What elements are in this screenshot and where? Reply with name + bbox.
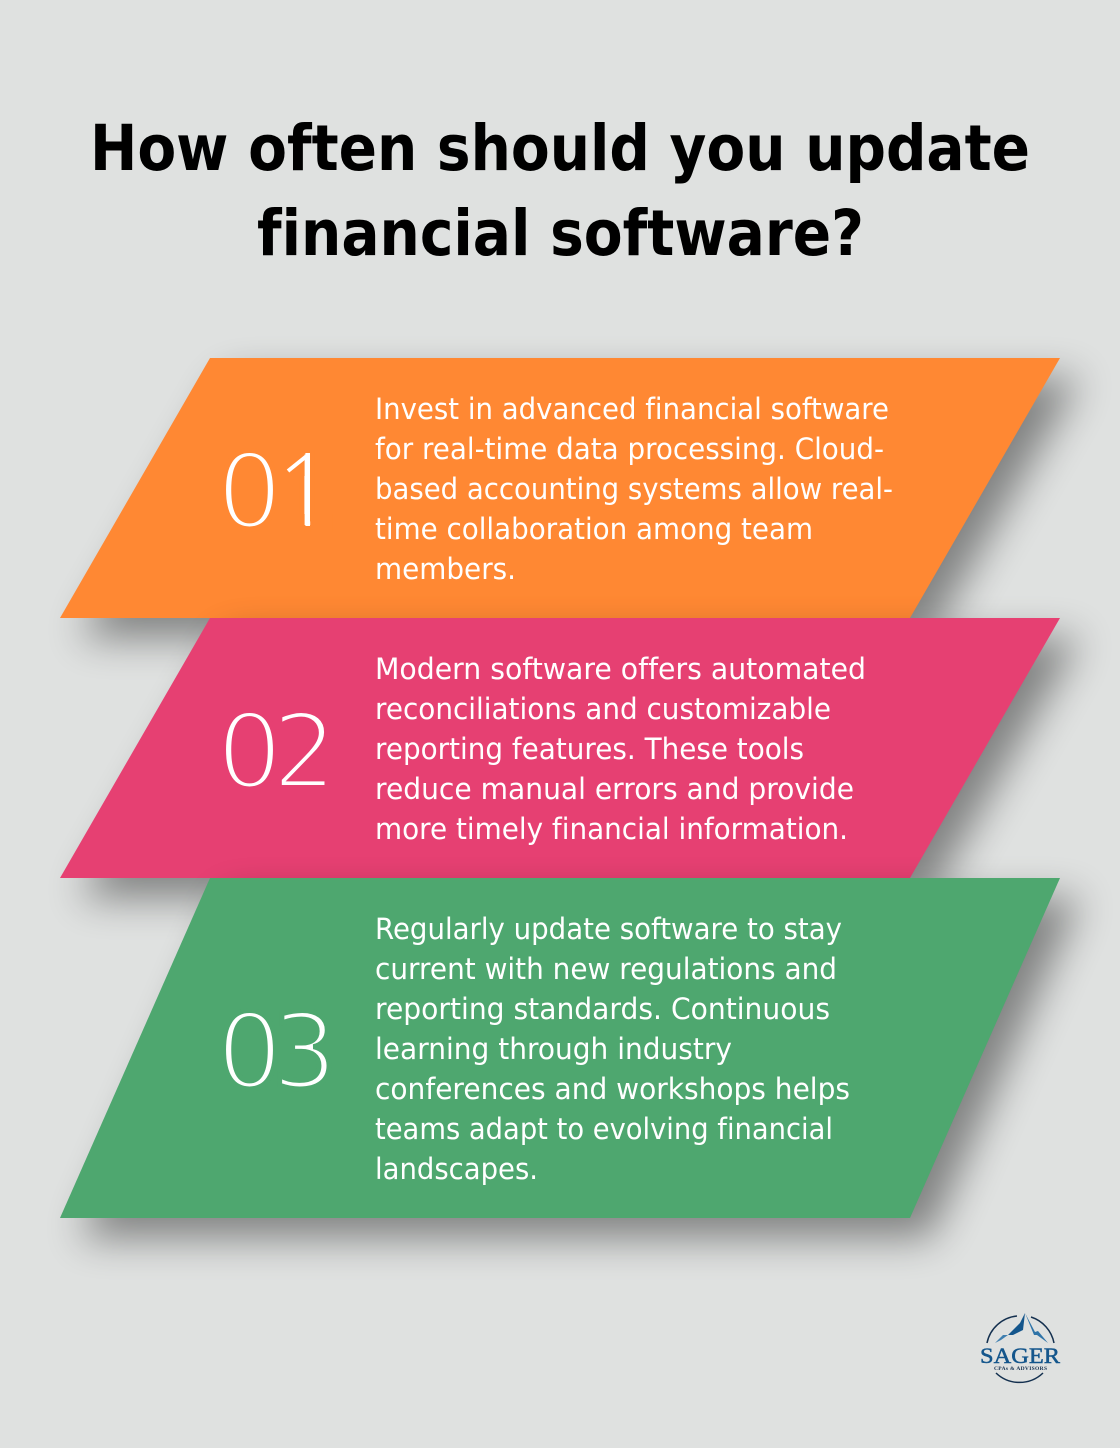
text block 03: learning through industry	[375, 1032, 732, 1066]
title: How often should you update	[90, 112, 1030, 185]
green parallelogram	[60, 878, 1060, 1218]
panel: step 03	[60, 878, 1080, 1238]
text block 03	[375, 912, 850, 1186]
icon: circle arcs	[987, 1316, 1054, 1382]
text block 03: current with new regulations and	[375, 952, 837, 986]
orange parallelogram	[60, 358, 1060, 618]
text block 01: based accounting systems allow real-	[375, 472, 893, 506]
text block 03: reporting standards. Continuous	[375, 992, 830, 1026]
pink parallelogram	[60, 618, 1060, 878]
number 01: 01	[217, 433, 338, 553]
number 03: 03	[217, 993, 337, 1113]
text block 01: for real-time data processing. Cloud-	[375, 432, 884, 466]
logo: Sager CPAs & Advisors	[980, 1313, 1060, 1382]
text block 01: members.	[375, 552, 516, 586]
panel: step 01	[60, 358, 1080, 638]
logo tagline: CPAs & ADVISORS	[994, 1366, 1047, 1372]
logo wordmark: SAGER	[980, 1343, 1060, 1368]
text block 03: conferences and workshops helps	[375, 1072, 850, 1106]
text block 02: more timely financial information.	[375, 812, 848, 846]
text block 03: teams adapt to evolving financial	[375, 1112, 833, 1146]
text block 03: landscapes.	[375, 1152, 538, 1186]
text block 01: Invest in advanced financial software	[375, 392, 889, 426]
text block 01: time collaboration among team	[375, 512, 813, 546]
text block 01	[375, 392, 893, 586]
text block 02: reporting features. These tools	[375, 732, 804, 766]
text block 02	[375, 652, 866, 846]
panel: step 02	[60, 618, 1080, 898]
title	[90, 112, 1030, 270]
number 02: 02	[217, 693, 337, 813]
icon: mountains	[995, 1313, 1048, 1343]
title: financial software?	[257, 197, 864, 270]
text block 03: Regularly update software to stay	[375, 912, 842, 946]
text block 02: reconciliations and customizable	[375, 692, 831, 726]
text block 02: reduce manual errors and provide	[375, 772, 854, 806]
text block 02: Modern software offers automated	[375, 652, 866, 686]
